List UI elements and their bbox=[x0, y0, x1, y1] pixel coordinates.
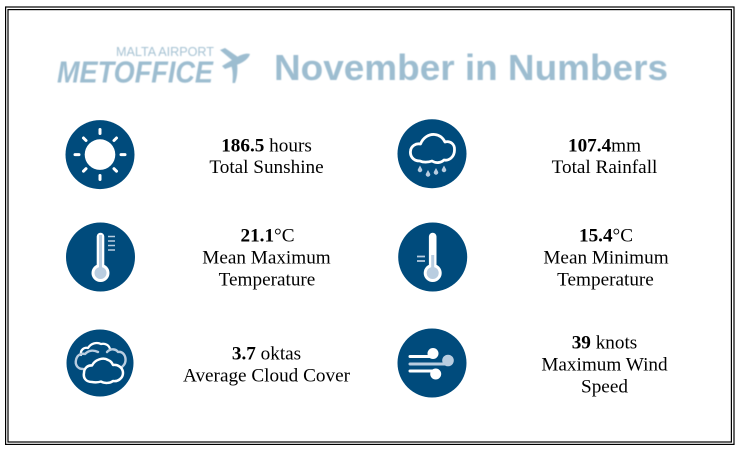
stat: mean minimum temperature bbox=[398, 222, 669, 292]
stat: total rainfall: Total Rainfall bbox=[552, 157, 657, 178]
icon: rain cloud bbox=[398, 119, 466, 188]
value and label: 15.4°C bbox=[579, 226, 633, 246]
stat: mean minimum temperature: Temperature bbox=[557, 270, 654, 290]
stat: total sunshine: Total Sunshine bbox=[209, 157, 324, 178]
icon: thermometer low bbox=[398, 222, 467, 292]
stat: maximum wind speed: Maximum Wind bbox=[541, 354, 668, 376]
stat: total sunshine bbox=[66, 120, 324, 189]
stat: maximum wind speed: Speed bbox=[581, 376, 628, 398]
icon: clouds bbox=[66, 330, 134, 396]
icon: wind bbox=[398, 328, 466, 398]
logo: Malta Airport Met Office bbox=[57, 44, 250, 90]
stat: mean minimum temperature: Mean Minimum bbox=[543, 248, 669, 268]
logo icon: aeroplane and wind turbine bbox=[220, 48, 250, 83]
stat: mean maximum temperature: Temperature bbox=[219, 270, 315, 290]
value and label: 21.1°C bbox=[240, 226, 295, 246]
value and label: 3.7 oktas bbox=[232, 344, 301, 364]
icon: thermometer high bbox=[66, 222, 135, 292]
stat: mean maximum temperature: Mean Maximum bbox=[202, 248, 331, 268]
stat: total rainfall bbox=[398, 119, 657, 188]
value and label: 186.5 hours bbox=[221, 136, 312, 156]
title: November in Numbers bbox=[274, 47, 668, 88]
value and label: 39 knots bbox=[572, 332, 637, 354]
stat: average cloud cover: Average Cloud Cover bbox=[183, 366, 351, 386]
value and label: 107.4mm bbox=[568, 136, 641, 156]
logo text: Metoffice: METOFFICE bbox=[57, 54, 214, 90]
stat: average cloud cover bbox=[66, 330, 351, 396]
logo text: Malta Airport: MALTA AIRPORT bbox=[116, 44, 214, 59]
icon: sun bbox=[66, 120, 134, 189]
stat: mean maximum temperature bbox=[66, 222, 331, 292]
stat: maximum wind speed bbox=[398, 328, 668, 398]
